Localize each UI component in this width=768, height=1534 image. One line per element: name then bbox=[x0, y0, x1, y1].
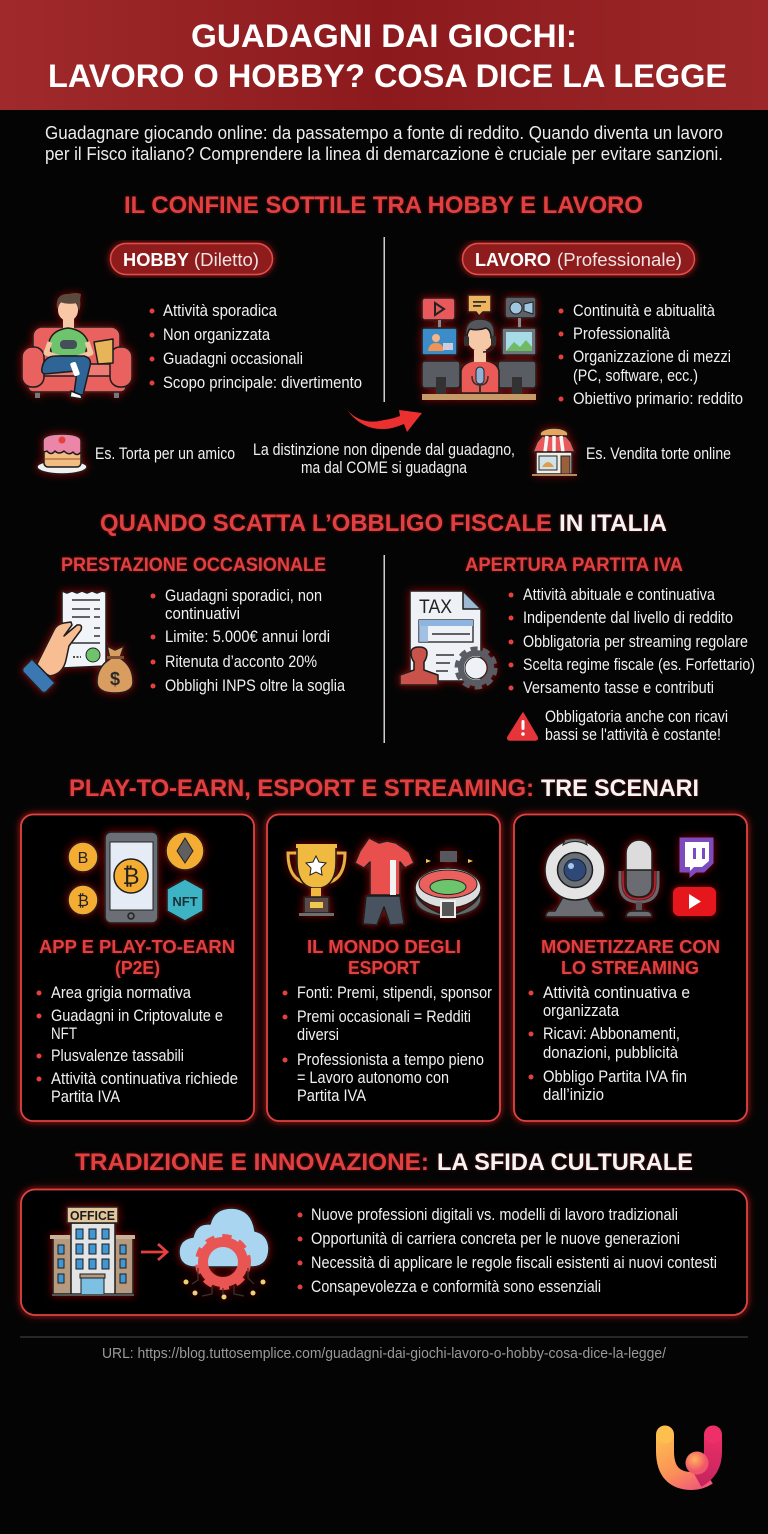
card list bbox=[36, 984, 238, 1106]
pill: hobby bbox=[110, 244, 272, 274]
section heading: sfida culturale: LA SFIDA CULTURALE bbox=[437, 1149, 693, 1176]
card heading: MONETIZZARE CON bbox=[541, 936, 720, 957]
card heading: (P2E) bbox=[115, 957, 160, 978]
card list: Professionista a tempo pieno bbox=[297, 1051, 484, 1069]
section heading: sfida culturale: TRADIZIONE E INNOVAZIONE: bbox=[75, 1149, 429, 1176]
card list: Partita IVA bbox=[51, 1088, 120, 1106]
card list: donazioni, pubblicità bbox=[543, 1044, 679, 1062]
icon: phone and crypto: ₿ bbox=[77, 892, 89, 910]
card list: Plusvalenze tassabili bbox=[51, 1047, 184, 1065]
section heading: sfida culturale bbox=[75, 1149, 693, 1176]
card list bbox=[282, 984, 492, 1105]
section heading: obbligo fiscale: IN ITALIA bbox=[559, 510, 667, 537]
card list: Guadagni in Criptovalute e bbox=[51, 1007, 223, 1025]
list: lavoro bbox=[558, 302, 743, 408]
example: lavoro: Es. Vendita torte online bbox=[586, 445, 731, 463]
card list: = Lavoro autonomo con bbox=[297, 1069, 449, 1087]
intro text: Guadagnare giocando online: da passatempo a fonte di reddito. Quando diventa un lavoro bbox=[45, 123, 723, 143]
card list: Obbligo Partita IVA fin bbox=[543, 1068, 687, 1086]
intro text: per il Fisco italiano? Comprendere la linea di demarcazione è cruciale per evitare sanzioni. bbox=[45, 144, 723, 164]
card heading: ESPORT bbox=[348, 957, 421, 978]
icon: phone and crypto: ₿ bbox=[122, 863, 140, 889]
list: partita iva bbox=[508, 586, 755, 697]
list: prestazione occasionale: Ritenuta d’acconto 20% bbox=[165, 653, 317, 671]
card list: Ricavi: Abbonamenti, bbox=[543, 1025, 680, 1043]
arrow: tradition to innovation bbox=[141, 1244, 167, 1260]
section heading: confine: IL CONFINE SOTTILE TRA HOBBY E LAVORO bbox=[124, 192, 643, 219]
section heading: tre scenari: TRE SCENARI bbox=[541, 775, 699, 802]
card list: NFT bbox=[51, 1025, 77, 1043]
list: lavoro: (PC, software, ecc.) bbox=[573, 367, 698, 385]
arrow: hobby to lavoro bbox=[347, 410, 422, 432]
icon: office building: OFFICE bbox=[70, 1208, 115, 1223]
intro text bbox=[45, 123, 723, 164]
note: distinction: ma dal COME si guadagna bbox=[301, 459, 468, 477]
card list bbox=[528, 984, 690, 1104]
card list: Attività continuativa richiede bbox=[51, 1070, 238, 1088]
card list: Fonti: Premi, stipendi, sponsor bbox=[297, 984, 492, 1002]
card heading: LO STREAMING bbox=[561, 957, 699, 978]
pill: hobby: (Diletto) bbox=[194, 250, 259, 270]
icon: streamer desk bbox=[422, 295, 536, 400]
icon: receipt, hand and money bag: $ bbox=[110, 669, 120, 689]
icon: person on sofa bbox=[22, 293, 132, 399]
panel list: Nuove professioni digitali vs. modelli di lavoro tradizionali bbox=[311, 1206, 678, 1224]
panel list: Necessità di applicare le regole fiscali esistenti ai nuovi contesti bbox=[311, 1254, 717, 1272]
icon: cloud gear bbox=[179, 1208, 269, 1300]
icon: trophy, jersey, stadium bbox=[288, 838, 481, 925]
warning note: bassi se l'attività è costante! bbox=[545, 726, 721, 744]
pill: lavoro: LAVORO bbox=[475, 250, 551, 270]
pill: hobby: HOBBY bbox=[123, 250, 189, 270]
panel: esport bbox=[267, 814, 500, 1121]
title: GUADAGNI DAI GIOCHI: bbox=[191, 18, 577, 54]
note: distinction: La distinzione non dipende dal guadagno, bbox=[253, 441, 515, 459]
list: hobby: Attività sporadica bbox=[163, 302, 278, 320]
list: partita iva: Versamento tasse e contributi bbox=[523, 679, 714, 697]
list: lavoro: Continuità e abitualità bbox=[573, 302, 716, 320]
icon: webcam, microphone, twitch, youtube bbox=[545, 838, 716, 917]
card heading: IL MONDO DEGLI bbox=[307, 936, 461, 957]
panel: app e play-to-earn bbox=[21, 814, 254, 1121]
panel list: Consapevolezza e conformità sono essenziali bbox=[311, 1278, 601, 1296]
icon: shop bbox=[532, 428, 577, 476]
card list: dall’inizio bbox=[543, 1086, 604, 1104]
warning note: Obbligatoria anche con ricavi bbox=[545, 708, 728, 726]
title bbox=[48, 18, 727, 94]
subheading: partita iva: APERTURA PARTITA IVA bbox=[465, 555, 683, 576]
card list: Premi occasionali = Redditi bbox=[297, 1008, 471, 1026]
list: prestazione occasionale: Obblighi INPS oltre la soglia bbox=[165, 677, 346, 695]
card heading bbox=[541, 936, 720, 978]
list: lavoro: Obiettivo primario: reddito bbox=[573, 390, 743, 408]
list: prestazione occasionale: Guadagni sporadici, non bbox=[165, 587, 322, 605]
header banner bbox=[0, 0, 768, 110]
subheading: prestazione occasionale: PRESTAZIONE OCCASIONALE bbox=[61, 555, 326, 576]
icon: cake bbox=[37, 434, 87, 474]
list: hobby bbox=[150, 302, 362, 392]
card heading bbox=[39, 936, 235, 978]
list: lavoro: Organizzazione di mezzi bbox=[573, 348, 731, 366]
icon: phone and crypto: NFT bbox=[172, 894, 198, 909]
card list: organizzata bbox=[543, 1002, 620, 1020]
warning note bbox=[545, 708, 728, 744]
icon: warning bbox=[508, 713, 537, 740]
icon: office building bbox=[50, 1207, 135, 1296]
card list: Partita IVA bbox=[297, 1087, 366, 1105]
panel list bbox=[298, 1206, 717, 1296]
card heading: APP E PLAY-TO-EARN bbox=[39, 936, 235, 957]
card list: Attività continuativa e bbox=[543, 984, 690, 1002]
list: hobby: Scopo principale: divertimento bbox=[163, 374, 362, 392]
list: hobby: Guadagni occasionali bbox=[163, 350, 303, 368]
card heading bbox=[307, 936, 461, 978]
list: lavoro: Professionalità bbox=[573, 325, 671, 343]
list: hobby: Non organizzata bbox=[163, 326, 271, 344]
panel: streaming bbox=[514, 814, 747, 1121]
title: LAVORO O HOBBY? COSA DICE LA LEGGE bbox=[48, 58, 727, 94]
list: partita iva: Indipendente dal livello di reddito bbox=[523, 609, 733, 627]
panel list: Opportunità di carriera concreta per le nuove generazioni bbox=[311, 1230, 680, 1248]
pill: lavoro bbox=[462, 244, 694, 274]
example: hobby: Es. Torta per un amico bbox=[95, 445, 235, 463]
list: partita iva: Attività abituale e continuativa bbox=[523, 586, 716, 604]
list: prestazione occasionale bbox=[150, 587, 346, 695]
list: prestazione occasionale: continuativi bbox=[165, 605, 240, 623]
note: distinction bbox=[253, 441, 515, 477]
section heading: tre scenari: PLAY-TO-EARN, ESPORT E STREAMING: bbox=[69, 775, 534, 802]
icon: phone and crypto: B bbox=[78, 850, 88, 867]
card list: diversi bbox=[297, 1026, 339, 1044]
icon: logo bbox=[656, 1426, 722, 1481]
list: prestazione occasionale: Limite: 5.000€ annui lordi bbox=[165, 628, 330, 646]
pill: lavoro: (Professionale) bbox=[557, 250, 682, 270]
icon: tax document: TAX bbox=[419, 597, 452, 618]
icon: tax document bbox=[400, 591, 495, 687]
source url: URL: https://blog.tuttosemplice.com/guadagni-dai-giochi-lavoro-o-hobby-cosa-dice-la-legge/ bbox=[102, 1345, 667, 1362]
icon: receipt, hand and money bag bbox=[22, 591, 133, 693]
section heading: obbligo fiscale: QUANDO SCATTA L’OBBLIGO FISCALE bbox=[100, 510, 552, 537]
card list: Area grigia normativa bbox=[51, 984, 192, 1002]
panel: tradizione e innovazione bbox=[21, 1190, 747, 1315]
icon: phone and crypto bbox=[68, 832, 204, 923]
